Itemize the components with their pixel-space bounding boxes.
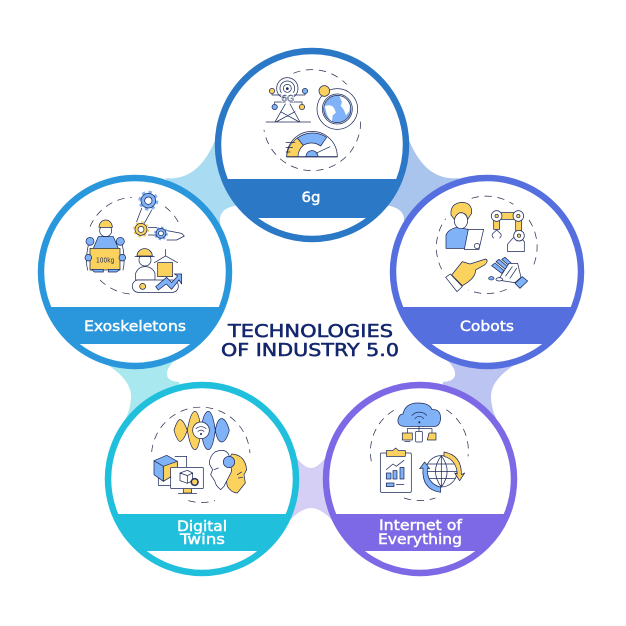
panel: 6g bbox=[210, 51, 414, 239]
connector: digital twins to exoskeletons bbox=[106, 360, 182, 430]
icon: exoskeleton worker, gears and conveyor: 100kg bbox=[96, 256, 114, 265]
icon: person, robot arm and hand touch bbox=[436, 196, 537, 294]
panel: exoskeletons bbox=[33, 178, 237, 366]
panel: cobots bbox=[385, 178, 589, 366]
panel: internet of everything bbox=[318, 385, 522, 573]
icon: cloud network, report clipboard and rotating globe bbox=[370, 403, 468, 501]
label band: cobots: Cobots bbox=[460, 319, 514, 335]
label band: digital twins bbox=[118, 514, 286, 551]
connector: 6g to cobots bbox=[374, 135, 459, 252]
label band: digital twins: Digital bbox=[177, 519, 227, 535]
label band: digital twins: Twins bbox=[179, 532, 225, 548]
connector: cobots to internet of everything bbox=[440, 360, 516, 430]
icon: sound wave, cube on monitor and twin heads bbox=[152, 407, 250, 503]
title: OF INDUSTRY 5.0 bbox=[221, 340, 399, 361]
label band: cobots bbox=[403, 307, 571, 344]
label band: exoskeletons bbox=[51, 307, 219, 344]
label band: exoskeletons: Exoskeletons bbox=[84, 319, 186, 335]
label band: internet of everything bbox=[336, 514, 504, 551]
icon: 6g tower, globe and speed gauge bbox=[264, 70, 361, 171]
label band: 6g: 6g bbox=[302, 190, 320, 206]
label band: internet of everything: Everything bbox=[378, 532, 462, 548]
title bbox=[221, 321, 399, 361]
label band: internet of everything: Internet of bbox=[379, 518, 463, 534]
connector: exoskeletons to 6g bbox=[165, 135, 250, 252]
icon: exoskeleton worker, gears and conveyor bbox=[85, 192, 184, 294]
title: TECHNOLOGIES bbox=[227, 321, 393, 342]
label band: 6g bbox=[228, 179, 396, 218]
connector: internet of everything to digital twins bbox=[290, 448, 332, 520]
icon: 6g tower, globe and speed gauge: 6G bbox=[281, 94, 294, 104]
panel: digital twins bbox=[100, 385, 304, 573]
